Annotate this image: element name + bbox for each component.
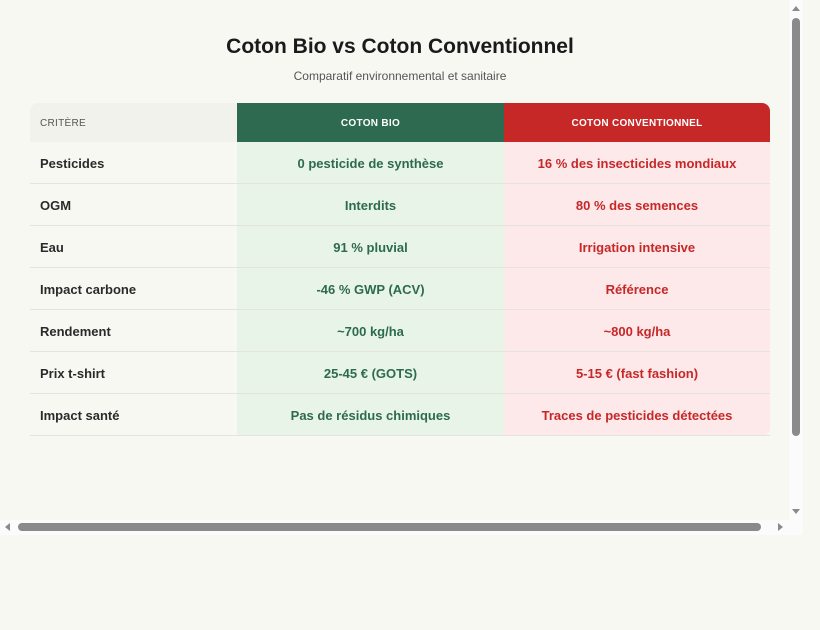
comparison table [30,103,770,436]
comparison table: 5-15 € (fast fashion) [576,366,698,380]
comparison table: Pas de résidus chimiques [291,408,450,422]
comparison table: 0 pesticide de synthèse [298,156,443,170]
title: Coton Bio vs Coton Conventionnel [226,35,574,58]
comparison table: -46 % GWP (ACV) [316,282,425,296]
comparison table: Rendement [40,324,111,338]
comparison table: Impact carbone [40,282,136,296]
comparison table: OGM [40,198,71,212]
comparison table: ~800 kg/ha [604,324,670,338]
comparison table: Traces de pesticides détectées [542,408,732,422]
comparison table: Impact santé [40,408,119,422]
comparison table: Pesticides [40,156,104,170]
vertical scrollbar [789,0,803,520]
subtitle: Comparatif environnemental et sanitaire [294,69,506,83]
comparison table: COTON CONVENTIONNEL [571,118,703,129]
comparison table: Prix t-shirt [40,366,105,380]
comparison table: Eau [40,240,64,254]
horizontal scrollbar [0,520,803,535]
comparison table: Irrigation intensive [579,240,695,254]
comparison table: 25-45 € (GOTS) [324,366,417,380]
comparison table: COTON BIO [341,118,400,129]
comparison table: 91 % pluvial [333,240,408,254]
comparison table: Interdits [345,198,396,212]
comparison table: 16 % des insecticides mondiaux [538,156,736,170]
comparison table: Référence [606,282,668,296]
comparison table: 80 % des semences [576,198,698,212]
comparison table: ~700 kg/ha [337,324,404,338]
comparison table: CRITÈRE [40,118,86,129]
